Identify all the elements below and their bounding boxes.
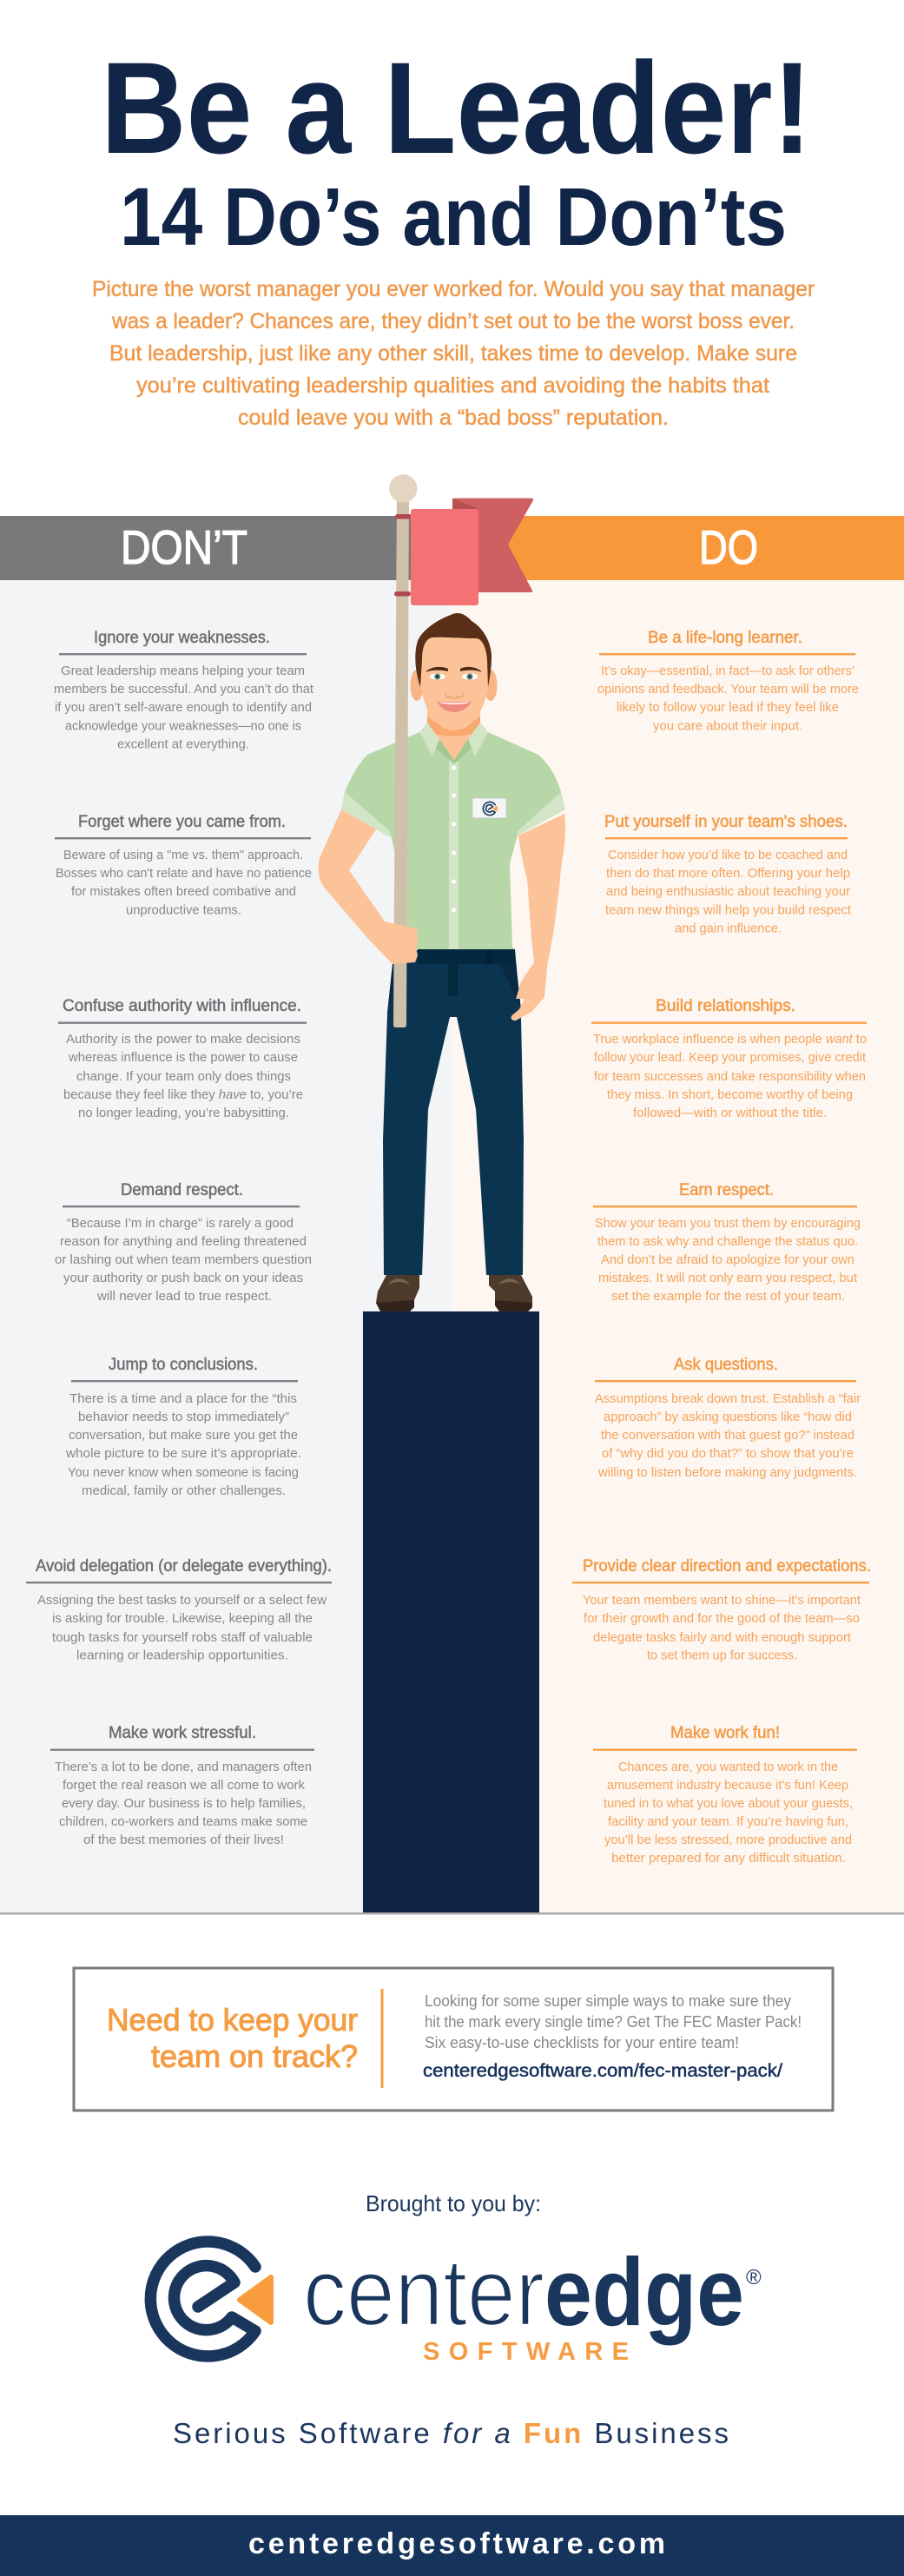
- body: better prepared for any difficult situation.: [611, 1851, 846, 1866]
- callout text: Looking for some super simple ways to make sure they: [425, 1991, 792, 2010]
- flag pole: [389, 474, 417, 1027]
- body: [54, 664, 314, 752]
- body: [37, 1593, 327, 1662]
- body: every day. Our business is to help families,: [62, 1796, 306, 1811]
- right arm and hand: [511, 814, 565, 1020]
- body: Chances are, you wanted to work in the: [618, 1760, 838, 1774]
- intro text: could leave you with a “bad boss” reputation.: [238, 406, 669, 430]
- body: approach” by asking questions like “how did: [604, 1410, 852, 1424]
- body: Show your team you trust them by encouraging: [595, 1216, 861, 1231]
- body: [55, 1760, 312, 1847]
- shoes: [376, 1275, 532, 1311]
- body: Bosses who can't relate and have no patience: [56, 866, 312, 881]
- body: facility and your team. If you’re having fun,: [608, 1814, 848, 1829]
- brought to you by: Brought to you by:: [366, 2190, 541, 2216]
- body: There’s a lot to be done, and managers often: [55, 1760, 312, 1774]
- logo: centeredge software: [150, 2239, 762, 2366]
- callout: master pack: [74, 1968, 833, 2110]
- body: for mistakes often breed combative and: [71, 884, 296, 899]
- icon: e mark: [150, 2242, 271, 2356]
- body: [56, 848, 312, 917]
- body: excellent at everything.: [117, 736, 249, 752]
- heading: Jump to conclusions.: [109, 1356, 258, 1374]
- heading: Make work stressful.: [109, 1724, 256, 1742]
- callout text: [423, 1991, 802, 2081]
- body: True workplace influence is when people want to: [593, 1032, 867, 1047]
- heading: Ask questions.: [674, 1356, 778, 1374]
- body: Beware of using a "me vs. them" approach.: [63, 848, 303, 862]
- bottom edge line: [0, 1912, 904, 1914]
- panel: do 5: [595, 1356, 861, 1480]
- body: Authority is the power to make decisions: [66, 1032, 300, 1047]
- body: for team successes and take responsibility when: [594, 1069, 866, 1084]
- body: because they feel like they have to, you’re: [63, 1087, 303, 1102]
- body: then do that more often. Offering your help: [606, 866, 850, 881]
- body: you care about their input.: [653, 719, 802, 733]
- body: “Because I’m in charge” is rarely a good: [67, 1216, 294, 1231]
- intro text: [92, 277, 815, 430]
- heading: Make work fun!: [670, 1724, 780, 1742]
- body: to set them up for success.: [647, 1648, 797, 1662]
- banner: do: [452, 516, 904, 580]
- panel: do background: [452, 580, 904, 1912]
- body: [583, 1593, 861, 1662]
- wordmark: [303, 2239, 762, 2366]
- body: learning or leadership opportunities.: [76, 1648, 288, 1662]
- intro text: Picture the worst manager you ever worked for. Would you say that manager: [92, 277, 815, 301]
- callout heading: team on track?: [151, 2038, 358, 2074]
- body: set the example for the rest of your team.: [611, 1289, 845, 1304]
- body: delegate tasks fairly and with enough support: [593, 1630, 852, 1645]
- flag: [411, 499, 533, 605]
- heading: Be a life-long learner.: [648, 629, 802, 647]
- panel: do 2: [604, 813, 852, 936]
- panel: do 6: [572, 1557, 871, 1662]
- body: There is a time and a place for the “this: [69, 1391, 297, 1406]
- wordmark: SOFTWARE: [423, 2338, 629, 2366]
- body: [595, 1391, 861, 1480]
- body: change. If your team only does things: [76, 1069, 291, 1084]
- heading: Earn respect.: [679, 1181, 774, 1199]
- body: likely to follow your lead if they feel like: [617, 700, 839, 715]
- body: unproductive teams.: [126, 903, 241, 917]
- body: You never know when someone is facing: [68, 1465, 299, 1480]
- callout text: hit the mark every single time? Get The FEC Master Pack!: [425, 2012, 802, 2031]
- body: whereas influence is the power to cause: [68, 1050, 298, 1065]
- body: Assumptions break down trust. Establish a “fair: [595, 1391, 861, 1406]
- subtitle: 14 Do’s and Don’ts: [120, 171, 787, 263]
- body: [55, 1216, 312, 1304]
- body: [63, 1032, 303, 1120]
- body: tuned in to what you love about your guests,: [604, 1796, 853, 1811]
- callout text: centeredgesoftware.com/fec-master-pack/: [423, 2061, 782, 2081]
- heading: Avoid delegation (or delegate everything).: [36, 1557, 332, 1575]
- illustration: leader with flag: [319, 474, 565, 1311]
- wordmark: ®: [746, 2266, 762, 2289]
- body: [65, 1391, 301, 1498]
- body: or lashing out when team members question: [55, 1252, 312, 1267]
- body: no longer leading, you’re babysitting.: [78, 1106, 289, 1120]
- panel: don't 1: [54, 629, 314, 752]
- body: conversation, but make sure you get the: [69, 1428, 298, 1443]
- shirt: [341, 723, 565, 949]
- body: your authority or push back on your ideas: [63, 1271, 303, 1285]
- heading: Confuse authority with influence.: [63, 997, 301, 1015]
- body: [597, 664, 859, 733]
- panel: don't 6: [26, 1557, 332, 1662]
- banner: don't: DON’T: [121, 520, 247, 574]
- panel: do 7: [593, 1724, 857, 1866]
- panel: don't 5: [65, 1356, 301, 1498]
- body: of “why did you do that?” to show that you’re: [602, 1446, 854, 1461]
- intro text: But leadership, just like any other skill, takes time to develop. Make sure: [109, 341, 797, 366]
- panel: don't 3: [58, 997, 307, 1120]
- body: they miss. In short, become worthy of being: [607, 1087, 853, 1102]
- body: Your team members want to shine—it’s important: [583, 1593, 861, 1608]
- body: And don’t be afraid to apologize for your own: [601, 1252, 855, 1267]
- tagline: Serious Software for a Fun Business: [173, 2417, 729, 2449]
- pants: [383, 948, 524, 1275]
- body: amusement industry because it’s fun! Keep: [607, 1778, 848, 1793]
- intro text: was a leader? Chances are, they didn’t set out to be the worst boss ever.: [111, 309, 795, 334]
- banner: don't: [0, 516, 452, 580]
- body: whole picture to be sure it’s appropriate.: [65, 1446, 301, 1461]
- panel: do 3: [591, 997, 867, 1120]
- body: Great leadership means helping your team: [61, 664, 305, 678]
- name badge: [472, 798, 506, 818]
- body: if you aren’t self-aware enough to identify and: [55, 700, 312, 715]
- body: [595, 1216, 861, 1304]
- body: of the best memories of their lives!: [83, 1833, 284, 1847]
- body: you’ll be less stressed, more productive and: [604, 1833, 852, 1847]
- body: [593, 1032, 867, 1120]
- panel: don't 2: [55, 813, 312, 917]
- neck: [427, 709, 480, 760]
- body: It’s okay—essential, in fact—to ask for others’: [601, 664, 855, 678]
- body: tough tasks for yourself robs staff of valuable: [52, 1630, 313, 1645]
- callout text: Six easy-to-use checklists for your entire team!: [425, 2033, 739, 2051]
- body: behavior needs to stop immediately”: [78, 1410, 289, 1424]
- footer bar: [0, 2515, 904, 2576]
- callout heading: Need to keep your: [107, 2002, 358, 2038]
- body: forget the real reason we all come to work: [63, 1778, 305, 1793]
- body: opinions and feedback. Your team will be more: [597, 682, 859, 697]
- body: and gain influence.: [675, 921, 782, 936]
- body: members be successful. And you can’t do that: [54, 682, 314, 697]
- body: reason for anything and feeling threatened: [60, 1234, 307, 1249]
- body: the conversation with that guest go?” instead: [601, 1428, 855, 1443]
- body: Consider how you’d like to be coached and: [608, 848, 848, 862]
- body: children, co-workers and teams make some: [59, 1814, 307, 1829]
- heading: Provide clear direction and expectations.: [583, 1557, 871, 1575]
- body: willing to listen before making any judgments.: [597, 1465, 857, 1480]
- body: mistakes. It will not only earn you respect, but: [598, 1271, 858, 1285]
- intro text: you’re cultivating leadership qualities and avoiding the habits that: [136, 373, 769, 398]
- footer bar: centeredgesoftware.com: [248, 2527, 665, 2560]
- callout heading: [107, 2002, 358, 2074]
- banner: do: DO: [699, 520, 758, 574]
- heading: Ignore your weaknesses.: [94, 629, 270, 647]
- panel: don't background: [0, 580, 452, 1912]
- panel: do 1: [597, 629, 859, 733]
- heading: Build relationships.: [656, 997, 795, 1015]
- panel: don't 7: [50, 1724, 314, 1847]
- wordmark: edge: [544, 2239, 744, 2346]
- body: is asking for trouble. Likewise, keeping all the: [52, 1611, 313, 1626]
- body: medical, family or other challenges.: [82, 1483, 286, 1498]
- body: [605, 848, 852, 936]
- body: Assigning the best tasks to yourself or a select few: [37, 1593, 327, 1608]
- left arm and hand: [319, 809, 418, 964]
- body: will never lead to true respect.: [96, 1289, 272, 1304]
- body: and being enthusiastic about teaching your: [606, 884, 850, 899]
- body: team new things will help you build respect: [605, 903, 852, 917]
- body: [604, 1760, 853, 1866]
- heading: Demand respect.: [121, 1181, 243, 1199]
- pedestal: [363, 1311, 539, 1912]
- heading: Put yourself in your team's shoes.: [604, 813, 848, 831]
- body: them to ask why and challenge the status quo.: [597, 1234, 858, 1249]
- wordmark: center: [303, 2239, 544, 2346]
- panel: do 4: [593, 1181, 861, 1304]
- title: Be a Leader!: [101, 35, 812, 181]
- panel: don't 4: [55, 1181, 312, 1304]
- body: for their growth and for the good of the team—so: [584, 1611, 860, 1626]
- body: follow your lead. Keep your promises, give credit: [594, 1050, 867, 1065]
- heading: Forget where you came from.: [78, 813, 286, 831]
- head: [410, 613, 497, 730]
- body: followed—with or without the title.: [633, 1106, 827, 1120]
- body: acknowledge your weaknesses—no one is: [65, 719, 301, 733]
